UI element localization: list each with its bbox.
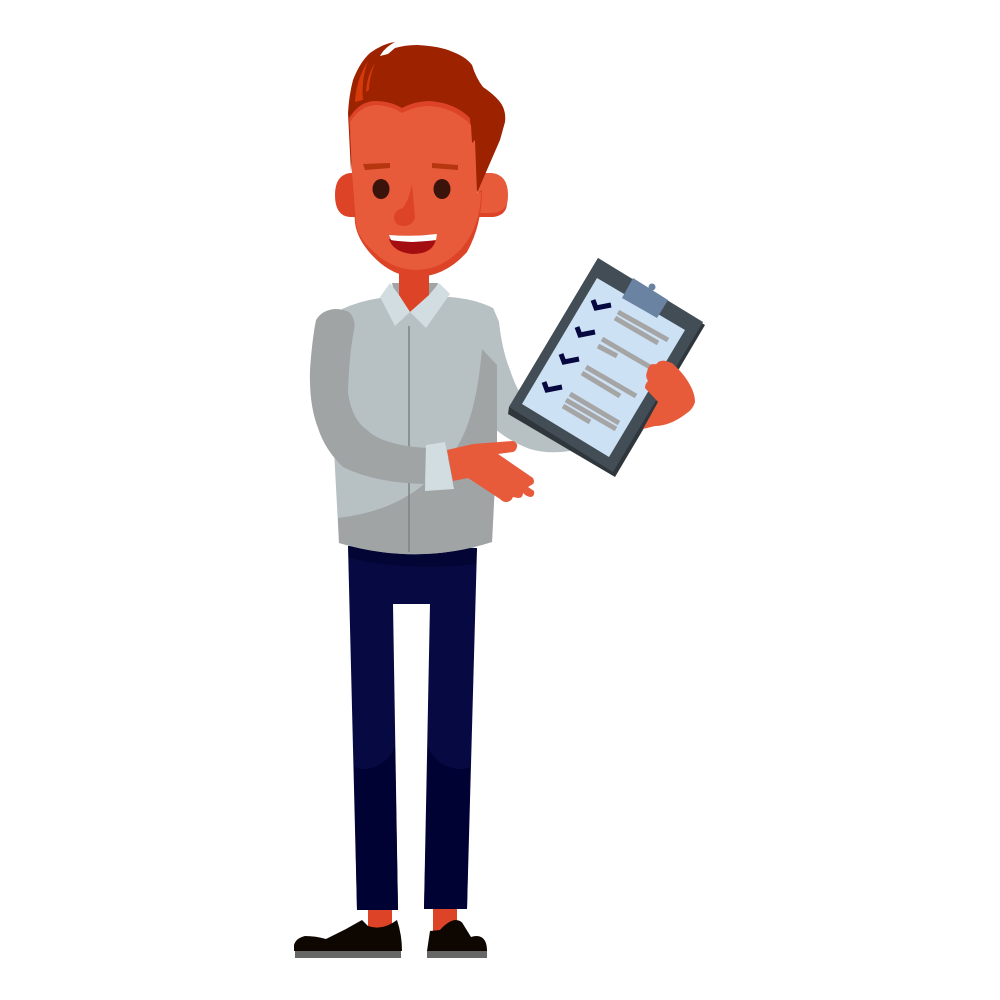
collar left	[380, 283, 410, 326]
collar right	[410, 283, 450, 328]
shirt body	[325, 297, 499, 554]
hair highlight	[355, 61, 375, 102]
hair	[348, 42, 505, 193]
socks	[368, 905, 457, 933]
eyes	[372, 179, 450, 199]
shirt shadow	[338, 349, 497, 554]
left shoe	[294, 920, 402, 951]
check marks	[544, 300, 611, 390]
open hand	[447, 441, 534, 502]
shirt cuff	[425, 442, 454, 491]
trousers	[348, 546, 477, 910]
shoes	[294, 920, 487, 958]
nose	[394, 184, 415, 226]
clipboard paper	[522, 278, 685, 457]
clipboard	[508, 258, 705, 477]
clipboard board	[508, 258, 705, 477]
face shadow	[349, 101, 482, 277]
left ear	[335, 173, 358, 217]
face	[350, 105, 481, 270]
right shoe	[427, 920, 487, 951]
checklist text lines	[563, 312, 668, 429]
right ear	[478, 173, 508, 217]
neck and collar	[380, 270, 450, 328]
eyebrows	[363, 163, 458, 170]
shirt placket	[408, 326, 410, 552]
hand holding clipboard	[643, 361, 695, 429]
far arm sleeve	[490, 308, 575, 452]
clipboard clip	[622, 278, 668, 318]
mouth	[389, 234, 437, 254]
head	[335, 42, 508, 277]
near arm sleeve	[310, 309, 426, 484]
neck	[399, 270, 429, 312]
